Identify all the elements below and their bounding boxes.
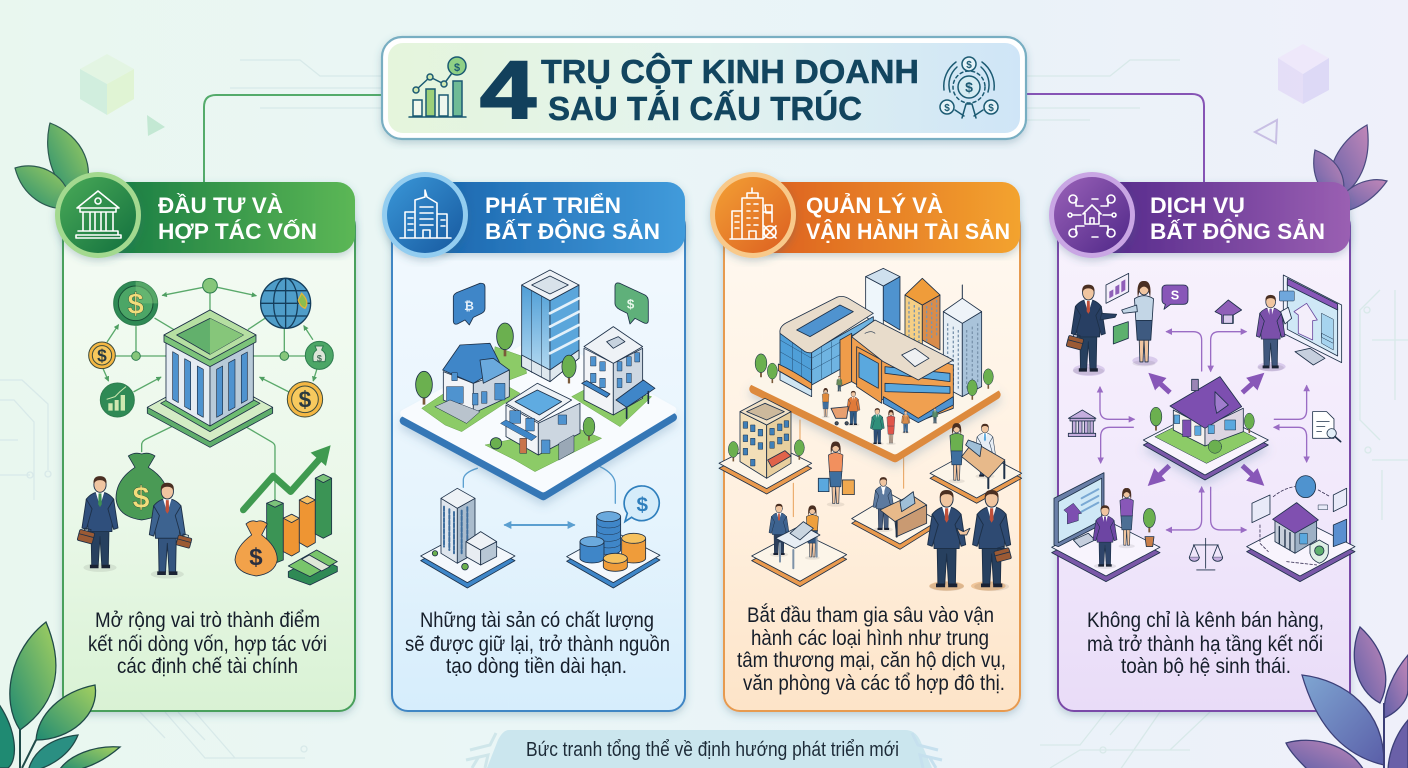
lower right bbox=[567, 531, 660, 588]
icon: service network bbox=[1049, 172, 1135, 258]
title panel bbox=[382, 37, 1026, 139]
bottom-left platform bbox=[1052, 473, 1160, 582]
walking woman bbox=[827, 442, 844, 507]
icon: coin cycle: $ bbox=[988, 103, 994, 114]
grass bbox=[422, 347, 652, 472]
worker at desk bbox=[873, 477, 894, 532]
modern house bbox=[501, 383, 580, 460]
tower bbox=[522, 270, 579, 382]
thin arrows bbox=[1100, 332, 1307, 530]
header: orange: QUẢN LÝ VÀ bbox=[806, 193, 943, 218]
towers bbox=[866, 268, 982, 397]
text: orange: Bắt đầu tham gia sâu vào vận bbox=[747, 602, 994, 627]
leaves: top left bbox=[15, 123, 88, 209]
top-right monitor bbox=[1279, 275, 1342, 365]
title number: 4 bbox=[480, 45, 536, 136]
illustration: real estate development: ₿ bbox=[464, 299, 474, 313]
header: purple bbox=[1095, 182, 1350, 253]
panel: orange bbox=[710, 172, 1022, 711]
text: green: các định chế tài chính bbox=[117, 654, 298, 678]
connector: purple bbox=[1026, 94, 1204, 182]
handshake bag bbox=[116, 453, 168, 520]
title panel: $ bbox=[454, 62, 460, 74]
text: blue: sẽ được giữ lại, trở thành nguồn bbox=[405, 632, 670, 656]
header: blue: PHÁT TRIỂN bbox=[485, 193, 621, 218]
text: green: Mở rộng vai trò thành điểm bbox=[95, 608, 320, 632]
house bbox=[435, 343, 509, 423]
title text: SAU TÁI CẤU TRÚC bbox=[548, 90, 862, 128]
illustration: investment network: $ bbox=[317, 353, 323, 363]
cart bbox=[831, 407, 848, 425]
leaves: bottom left bbox=[0, 622, 120, 768]
illustration: investment network bbox=[77, 278, 337, 585]
header: purple: BẤT ĐỘNG SẢN bbox=[1150, 219, 1325, 244]
header: purple: DỊCH VỤ bbox=[1150, 193, 1245, 218]
illustration: investment network: $ bbox=[249, 544, 263, 571]
central building bbox=[147, 310, 273, 447]
header: green: ĐẦU TƯ VÀ bbox=[158, 193, 283, 218]
panel: green bbox=[55, 172, 355, 711]
illustration: real estate development: $ bbox=[627, 296, 635, 311]
text: blue bbox=[405, 608, 670, 678]
bubbles bbox=[453, 283, 648, 325]
text: purple bbox=[1087, 608, 1324, 678]
decor: right triangle bbox=[1255, 120, 1277, 143]
header: orange bbox=[756, 182, 1020, 253]
leaves: top right bbox=[1314, 125, 1387, 211]
text: green bbox=[88, 608, 327, 678]
cash bbox=[288, 550, 337, 585]
header: orange: VẬN HÀNH TÀI SẢN bbox=[806, 219, 1010, 244]
left bank icon bbox=[1068, 410, 1096, 437]
text: purple: mà trở thành hạ tầng kết nối bbox=[1087, 632, 1323, 656]
text: blue: tạo dòng tiền dài hạn. bbox=[446, 654, 627, 678]
mall bbox=[778, 296, 953, 423]
illustration: investment network: $ bbox=[132, 480, 150, 514]
illustration: asset operations bbox=[719, 268, 1022, 591]
panel: blue bbox=[382, 172, 685, 711]
globe bbox=[261, 278, 311, 328]
header: blue bbox=[428, 182, 685, 253]
left building platform bbox=[719, 398, 812, 494]
text: blue: Những tài sản có chất lượng bbox=[420, 608, 654, 632]
meeting bbox=[948, 423, 965, 483]
thick arrows bbox=[1153, 377, 1259, 481]
decor: right cube bbox=[1278, 44, 1329, 104]
platform bbox=[754, 317, 996, 457]
icon: coin cycle bbox=[940, 57, 998, 118]
title text: TRỤ CỘT KINH DOANH bbox=[541, 52, 919, 91]
small house icon bbox=[1215, 300, 1242, 323]
title text bbox=[541, 52, 919, 128]
illustration: investment network: $ bbox=[299, 386, 312, 412]
illustration: real estate development: $ bbox=[637, 494, 649, 517]
header: green bbox=[100, 182, 355, 253]
illustration: real estate development bbox=[404, 270, 673, 588]
lower left bbox=[421, 488, 515, 588]
trend arrow bbox=[243, 459, 319, 510]
bottom-right platform bbox=[1247, 476, 1355, 582]
text: purple: toàn bộ hệ sinh thái. bbox=[1121, 654, 1291, 678]
text: green: kết nối dòng vốn, hợp tác với bbox=[88, 632, 327, 656]
icon: coin cycle: $ bbox=[965, 79, 973, 95]
shoppers bbox=[822, 388, 830, 418]
illustration: investment network: $ bbox=[128, 288, 144, 321]
illustration: service ecosystem bbox=[1052, 273, 1355, 582]
illustration: service ecosystem: S bbox=[1171, 288, 1179, 302]
top-left people bbox=[1073, 364, 1105, 376]
illustration: investment network: $ bbox=[97, 346, 107, 366]
decor: left triangle bbox=[147, 115, 165, 136]
team at table bbox=[769, 504, 789, 557]
scales bbox=[1189, 538, 1223, 570]
platform bbox=[404, 345, 673, 496]
icon: coin cycle: $ bbox=[966, 60, 972, 71]
panel: purple bbox=[1049, 172, 1355, 711]
document icon bbox=[1313, 412, 1341, 442]
text: orange: tâm thương mại, căn hộ dịch vụ, bbox=[737, 648, 1006, 672]
icon: city bbox=[382, 172, 468, 258]
header: green: HỢP TÁC VỐN bbox=[158, 218, 317, 244]
icon: bank bbox=[55, 172, 141, 258]
center platform bbox=[1143, 377, 1268, 480]
text: orange: văn phòng và các tổ hợp đô thị. bbox=[743, 671, 1005, 695]
icon: coin cycle: $ bbox=[944, 103, 950, 114]
text: orange: hành các loại hình như trung bbox=[751, 626, 989, 650]
decor: left cube bbox=[80, 54, 134, 115]
orange bag bbox=[235, 521, 277, 576]
header: blue: BẤT ĐỘNG SẢN bbox=[485, 219, 660, 244]
icon: growth chart bbox=[409, 57, 466, 117]
connector: green bbox=[204, 95, 382, 182]
leaves: bottom right bbox=[1286, 627, 1408, 768]
bars bbox=[267, 474, 332, 563]
office bbox=[582, 327, 655, 418]
desk platforms bbox=[752, 449, 1022, 587]
icon: managed buildings bbox=[710, 172, 796, 258]
footer banner bbox=[466, 730, 942, 768]
text: orange bbox=[737, 602, 1006, 695]
footer banner: Bức tranh tổng thể về định hướng phát triển mới bbox=[526, 738, 899, 761]
text: purple: Không chỉ là kênh bán hàng, bbox=[1087, 608, 1324, 632]
handshake bbox=[929, 581, 964, 591]
